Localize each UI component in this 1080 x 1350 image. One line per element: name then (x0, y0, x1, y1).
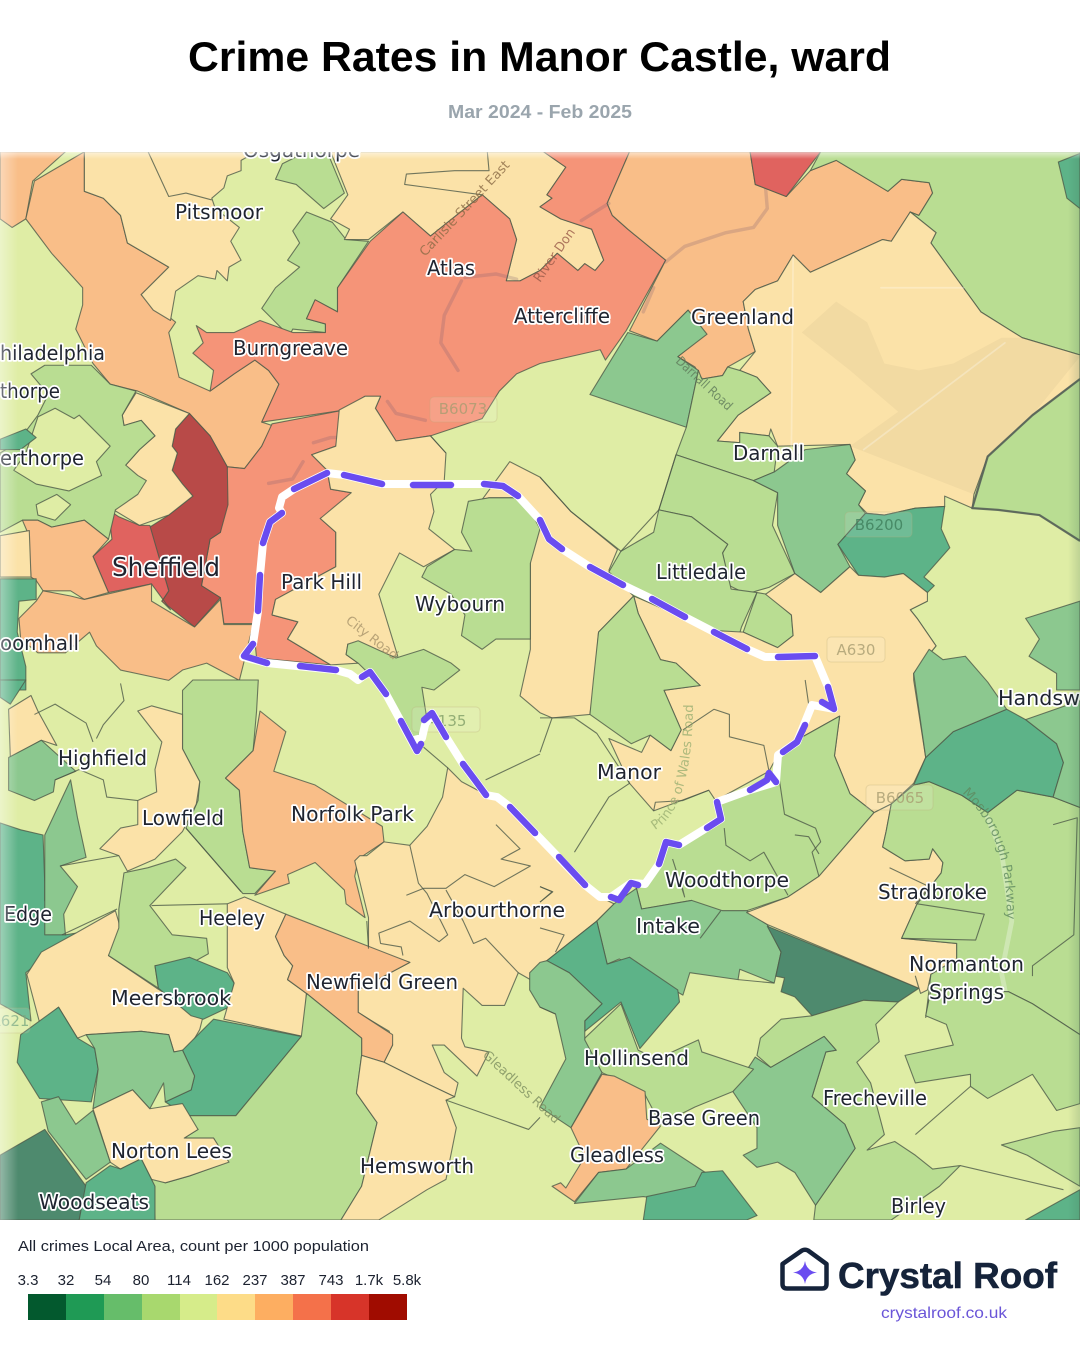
place labels: Handsw (998, 686, 1080, 710)
place labels: Norton Lees (111, 1139, 232, 1163)
road and river names: Mosborough Parkway (963, 787, 1016, 919)
road and river names: River Don (531, 226, 579, 285)
place labels: Base Green (648, 1106, 760, 1130)
legend values: 743 (318, 1272, 344, 1289)
place labels: Burngreave (233, 336, 348, 360)
road and river names: Carlisle Street East (417, 158, 513, 260)
brand url: crystalroof.co.uk (881, 1305, 1008, 1322)
place labels (0, 138, 1080, 1218)
map regions: north-west (0, 152, 666, 751)
place labels: Norfolk Park (291, 802, 414, 826)
road shields: B6073 (439, 400, 487, 418)
place labels: Hollinsend (584, 1046, 689, 1070)
road and river names: Darnall Road (672, 354, 735, 414)
place labels: Gleadless (570, 1143, 664, 1167)
place labels: Sheffield (112, 553, 220, 583)
legend title: All crimes Local Area, count per 1000 population (18, 1238, 369, 1255)
place labels: Highfield (58, 746, 147, 770)
place labels: hiladelphia (0, 341, 105, 365)
place labels: Normanton (909, 952, 1024, 976)
title: Crime Rates in Manor Castle, ward (188, 33, 891, 80)
place labels: Intake (636, 914, 700, 938)
place labels: Woodseats (39, 1190, 149, 1214)
road shields: A630 (837, 641, 875, 659)
place labels: Woodthorpe (665, 868, 789, 892)
place labels: Edge (4, 902, 52, 926)
place labels: Frecheville (823, 1086, 927, 1110)
road and river names (347, 161, 1016, 1124)
place labels: Lowfield (142, 806, 224, 830)
place labels: Manor (597, 760, 662, 784)
place labels: Pitsmoor (175, 200, 264, 224)
road shields (0, 397, 933, 1033)
place labels: oomhall (0, 631, 79, 655)
legend values: 162 (204, 1272, 230, 1289)
place labels: Darnall (733, 441, 804, 465)
place labels: Arbourthorne (429, 898, 565, 922)
legend values: 1.7k (355, 1272, 384, 1289)
place labels: Greenland (691, 305, 794, 329)
place labels: Park Hill (281, 570, 362, 594)
place labels: Heeley (199, 906, 265, 930)
legend values (18, 1272, 422, 1289)
road shields: A135 (428, 712, 466, 730)
place labels: Attercliffe (514, 304, 610, 328)
icon: Crystal Roof house logo (782, 1250, 826, 1288)
subtitle: date range: Mar 2024 - Feb 2025 (448, 102, 632, 122)
place labels: Osgathorpe (243, 138, 360, 162)
legend (18, 1238, 422, 1320)
legend values: 80 (133, 1272, 149, 1289)
legend values: 5.8k (393, 1272, 422, 1289)
place labels: Stradbroke (878, 880, 987, 904)
map regions: north-east (540, 152, 1080, 690)
legend values: 237 (242, 1272, 268, 1289)
road and river names: City Road (343, 613, 401, 663)
place labels: Littledale (656, 560, 746, 584)
legend colour scale (28, 1294, 407, 1320)
road and river names: Gleadless Road (479, 1048, 563, 1127)
road shields: B6200 (855, 516, 903, 534)
map edge fade (0, 152, 1080, 1220)
map regions: south-east (530, 567, 1080, 1220)
ward boundary: Manor Castle dashed route (243, 473, 834, 900)
place labels: Atlas (427, 256, 475, 280)
map regions: south-west (0, 680, 614, 1220)
place labels: erthorpe (0, 446, 84, 470)
legend values: 3.3 (18, 1272, 38, 1289)
legend values: 54 (95, 1272, 111, 1289)
brand name: Crystal Roof (838, 1255, 1058, 1296)
place labels: thorpe (0, 379, 60, 403)
place labels: Hemsworth (360, 1154, 474, 1178)
place labels: Springs (929, 980, 1004, 1004)
place labels: Birley (891, 1194, 946, 1218)
road and river names: Prince of Wales Road (650, 706, 694, 830)
place labels: Wybourn (415, 592, 505, 616)
legend values: 387 (280, 1272, 306, 1289)
place labels: Meersbrook (111, 986, 231, 1010)
place labels: Newfield Green (306, 970, 458, 994)
road shields: B6065 (876, 789, 924, 807)
legend values: 32 (58, 1272, 74, 1289)
legend values: 114 (167, 1272, 191, 1289)
